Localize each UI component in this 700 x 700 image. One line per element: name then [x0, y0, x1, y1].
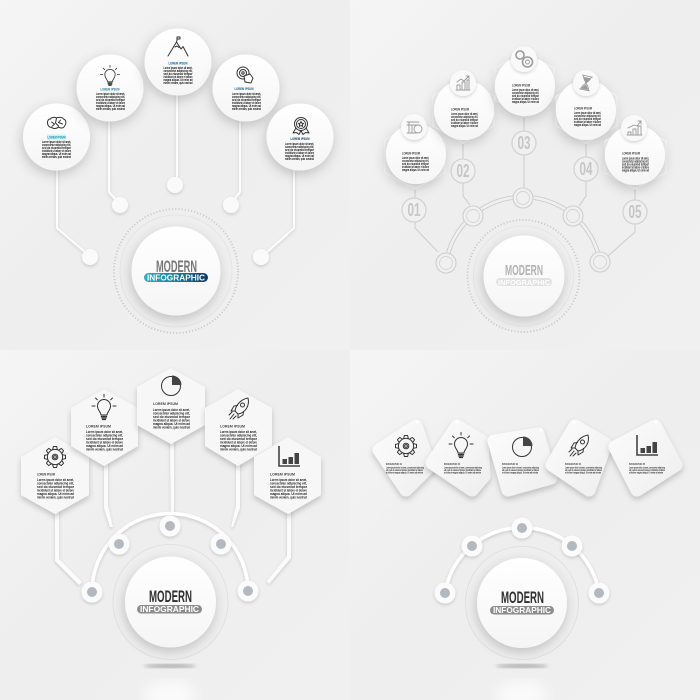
arc with nodes	[434, 518, 610, 604]
hexagon 1: gear: sed do eiusmod tempor	[37, 485, 75, 489]
connector lines	[57, 92, 294, 254]
card 5: award: Lorem ipsum dolor sit amet,	[285, 142, 314, 146]
number 02	[451, 159, 475, 183]
card 5: bar chart: elit, sed do eiusmod tempor incididunt ut labore	[629, 469, 665, 472]
card 3: pie chart: et dolore magna aliqua. Ut enim ad minim	[502, 472, 538, 474]
hexagon 5: bar chart: incididunt ut labore et dolore	[270, 488, 307, 492]
card 1: gear: et dolore magna aliqua. Ut enim ad minim	[386, 472, 423, 474]
arc with nodes	[82, 513, 258, 602]
shadow and reflection below badge	[144, 664, 196, 700]
card 4: rocket: Lorem ipsum dolor sit amet, consectetur adipiscing	[565, 466, 602, 470]
card 3: mountain	[144, 28, 212, 96]
hexagon 2: light bulb: sed do eiusmod tempor	[86, 437, 124, 441]
hexagon 4: rocket: magna aliqua. Ut enim ad	[220, 444, 257, 448]
panel: hexagon infographic (bottom left)	[21, 368, 321, 700]
card 3: mountain: LOREM IPSUM	[168, 60, 188, 66]
card 4: target: magna aliqua. Ut enim ad	[232, 104, 261, 108]
hexagon 2: light bulb: minim veniam, quis nostrud	[86, 448, 123, 452]
card 4: hourglass: LOREM IPSUM	[574, 106, 592, 110]
card 2: idea: consectetur adipiscing elit,	[96, 95, 125, 99]
central badge	[113, 544, 228, 660]
card 3: pie chart	[494, 428, 551, 490]
card 5: bar chart: et dolore magna aliqua. Ut enim ad minim	[629, 472, 663, 474]
card 3: mountain: incididunt ut labore et dolore	[164, 75, 193, 79]
panel: rotated card infographic (bottom right)	[379, 420, 676, 700]
number 05: 05	[628, 202, 642, 222]
hexagon 2: light bulb: magna aliqua. Ut enim ad	[86, 444, 123, 448]
number 03	[512, 131, 536, 155]
central badge: INFOGRAPHIC	[140, 605, 199, 614]
card 4: hourglass: magna aliqua. Ut enim ad	[574, 123, 601, 127]
card 4: hourglass: Lorem ipsum dolor sit amet,	[574, 111, 601, 115]
card 4: target: incididunt ut labore et dolore	[232, 101, 261, 105]
number 03: 03	[518, 133, 530, 153]
hexagon 5: bar chart: sed do eiusmod tempor	[270, 485, 308, 489]
card 2: growth chart: magna aliqua. Ut enim ad	[451, 124, 478, 128]
card 1: coins: Lorem ipsum dolor sit amet,	[402, 156, 429, 160]
hexagon 5: bar chart	[254, 437, 321, 514]
central badge: INFOGRAPHIC	[147, 273, 205, 283]
card 4: rocket: et dolore magna aliqua. Ut enim ad minim	[565, 472, 601, 474]
card 3: pie chart: INFOGRAPHIC 03	[502, 462, 518, 466]
card 5: rising bars: magna aliqua. Ut enim ad	[622, 168, 649, 172]
hexagon 3: pie chart: minim veniam, quis nostrud	[153, 426, 190, 430]
hexagon 4: rocket: incididunt ut labore et dolore	[220, 440, 257, 444]
card 1: coins: consectetur adipiscing elit,	[402, 159, 429, 163]
card 4: rocket: elit, sed do eiusmod tempor incididunt ut labore	[565, 469, 602, 472]
card 2: light bulb: Lorem ipsum dolor sit amet, consectetur adipiscing	[444, 466, 482, 470]
hexagon 5: bar chart: Lorem ipsum dolor sit amet,	[270, 478, 307, 482]
card 2: idea	[76, 54, 144, 122]
card 4: target	[212, 54, 280, 122]
hexagon 3: pie chart: incididunt ut labore et dolore	[153, 418, 190, 422]
card 2: growth chart: LOREM IPSUM	[451, 106, 469, 112]
panel: circles infographic (top left)	[23, 28, 334, 333]
hexagon 4: rocket: minim veniam, quis nostrud	[220, 448, 257, 452]
card 5: rising bars: sed do eiusmod tempor	[622, 162, 650, 166]
card 2: idea: Lorem ipsum dolor sit amet,	[96, 92, 125, 96]
card 5: rising bars: Lorem ipsum dolor sit amet,	[622, 156, 649, 160]
card 2: growth chart: sed do eiusmod tempor	[451, 118, 479, 122]
card 3: pie chart: Lorem ipsum dolor sit amet, consectetur adipiscing	[502, 466, 539, 470]
hexagon 2: light bulb: Lorem ipsum dolor sit amet,	[86, 430, 123, 434]
connector lines	[415, 117, 635, 256]
card 4: target: LOREM IPSUM	[234, 86, 254, 91]
hexagon 2: light bulb	[71, 389, 138, 466]
arc with nodes	[436, 188, 610, 273]
card 1: coins: incididunt ut labore et dolore	[402, 165, 429, 169]
card 1: brain: LOREM IPSUM	[48, 134, 66, 140]
number 02: 02	[456, 161, 470, 181]
hexagon 1: gear	[21, 437, 89, 514]
panel: hexagon and circle infographic (top right)	[385, 46, 666, 332]
card 4: hourglass: incididunt ut labore et dolore	[574, 120, 601, 124]
hexagon 1: gear: LOREM IPSUM	[37, 472, 55, 476]
card 5: award: magna aliqua. Ut enim ad	[285, 154, 314, 158]
central badge: INFOGRAPHIC	[498, 278, 551, 287]
card 2: growth chart	[433, 70, 494, 143]
card 5: rising bars: consectetur adipiscing elit,	[622, 160, 649, 164]
card 1: gear	[379, 420, 430, 490]
card 4: target: Lorem ipsum dolor sit amet,	[232, 92, 261, 96]
card 4: rocket: INFOGRAPHIC 04	[565, 462, 581, 466]
card 5: award: incididunt ut labore et dolore	[285, 151, 314, 155]
card 3: mountain: Lorem ipsum dolor sit amet,	[164, 66, 193, 70]
card 3: gears	[495, 46, 555, 117]
number 04	[574, 157, 598, 181]
card 3: mountain: magna aliqua. Ut enim ad	[164, 78, 193, 82]
card 1: brain: Lorem ipsum dolor sit amet,	[42, 140, 71, 144]
hexagon 1: gear: incididunt ut labore et dolore	[37, 488, 74, 492]
card 1: brain: sed do eiusmod tempor	[42, 146, 72, 150]
card 3: mountain: consectetur adipiscing elit,	[164, 69, 193, 73]
card 3: mountain: sed do eiusmod tempor	[164, 72, 193, 76]
card 2: idea: sed do eiusmod tempor	[96, 98, 126, 102]
card 1: gear: elit, sed do eiusmod tempor incididunt ut labore	[386, 469, 423, 472]
card 1: brain: consectetur adipiscing elit,	[42, 143, 71, 147]
card 5: award: consectetur adipiscing elit,	[285, 145, 314, 149]
hexagon 5: bar chart: minim veniam, quis nostrud	[270, 496, 307, 500]
hexagon 3: pie chart: magna aliqua. Ut enim ad	[153, 422, 190, 426]
card 1: brain	[23, 104, 90, 170]
card 1: coins: sed do eiusmod tempor	[402, 162, 430, 166]
connector end dots	[82, 177, 269, 265]
card 3: gears: consectetur adipiscing elit,	[512, 91, 539, 95]
card 5: award: minim veniam, quis nostrud	[285, 157, 314, 161]
card 1: gear: INFOGRAPHIC 01	[386, 462, 402, 466]
number 01: 01	[408, 200, 420, 220]
card 3: gears: Lorem ipsum dolor sit amet,	[512, 88, 539, 92]
card 2: light bulb: INFOGRAPHIC 02	[444, 462, 460, 466]
card 2: idea: LOREM IPSUM	[100, 86, 120, 92]
card 4: target: sed do eiusmod tempor	[232, 98, 262, 102]
card 2: idea: minim veniam, quis nostrud	[96, 107, 125, 111]
number 04: 04	[580, 159, 592, 179]
hexagon 1: gear: magna aliqua. Ut enim ad	[37, 492, 74, 496]
hexagon 1: gear: Lorem ipsum dolor sit amet,	[37, 478, 74, 482]
card 5: award: LOREM IPSUM	[290, 136, 310, 141]
card 5: bar chart: Lorem ipsum dolor sit amet, consectetur adipiscing	[629, 466, 665, 470]
hexagon 1: gear: consectetur adipiscing elit,	[37, 482, 74, 486]
card 2: idea: magna aliqua. Ut enim ad	[96, 104, 125, 108]
hexagon 3: pie chart: Lorem ipsum dolor sit amet,	[153, 408, 190, 412]
hexagon 3: pie chart: consectetur adipiscing elit,	[153, 412, 190, 416]
hexagon 3: pie chart	[137, 368, 205, 444]
number 01	[402, 198, 426, 222]
card 2: growth chart: Lorem ipsum dolor sit amet,	[451, 112, 478, 116]
hexagon 3: pie chart: sed do eiusmod tempor	[153, 415, 191, 419]
card 5: bar chart: INFOGRAPHIC 05	[629, 462, 645, 466]
hexagon 1: gear: minim veniam, quis nostrud	[37, 496, 74, 500]
number 05	[623, 200, 647, 224]
card 2: growth chart: consectetur adipiscing elit,	[451, 115, 478, 119]
hexagon 4: rocket: LOREM IPSUM	[220, 424, 246, 428]
central badge: MODERN	[156, 257, 197, 276]
card 5: rising bars: incididunt ut labore et dolore	[622, 166, 649, 170]
central badge	[468, 220, 580, 332]
card 3: pie chart: elit, sed do eiusmod tempor incididunt ut labore	[502, 469, 539, 472]
hexagon 5: bar chart: magna aliqua. Ut enim ad	[270, 492, 307, 496]
card 4: target: consectetur adipiscing elit,	[232, 95, 261, 99]
central badge	[114, 209, 238, 333]
card 1: brain: minim veniam, quis nostrud	[42, 155, 71, 159]
card 1: coins: magna aliqua. Ut enim ad	[402, 168, 429, 172]
card 2: light bulb: elit, sed do eiusmod tempor incididunt ut labore	[444, 469, 481, 472]
central badge: INFOGRAPHIC	[493, 606, 551, 615]
card 2: idea: incididunt ut labore et dolore	[96, 101, 125, 105]
card 2: light bulb	[432, 420, 484, 490]
central badge: MODERN	[505, 262, 543, 279]
card 3: gears: LOREM IPSUM	[512, 82, 530, 88]
hexagon 4: rocket: sed do eiusmod tempor	[220, 437, 258, 441]
card 3: mountain: minim veniam, quis nostrud	[164, 81, 193, 85]
hexagon 4: rocket: Lorem ipsum dolor sit amet,	[220, 430, 257, 434]
central badge	[466, 546, 578, 660]
central badge: MODERN	[149, 587, 192, 606]
card 3: gears: sed do eiusmod tempor	[512, 94, 540, 98]
hexagon 5: bar chart: LOREM IPSUM	[270, 472, 296, 476]
hexagon 5: bar chart: consectetur adipiscing elit,	[270, 482, 307, 486]
card 1: brain: magna aliqua. Ut enim ad	[42, 152, 71, 156]
hexagon 2: light bulb: LOREM IPSUM	[86, 424, 112, 428]
hexagon 4: rocket: consectetur adipiscing elit,	[220, 434, 257, 438]
card 2: growth chart: incididunt ut labore et dolore	[451, 121, 478, 125]
card 4: hourglass: consectetur adipiscing elit,	[574, 114, 601, 118]
hexagon 4: rocket	[205, 389, 272, 466]
connector stems	[55, 440, 291, 585]
card 1: gear: Lorem ipsum dolor sit amet, consectetur adipiscing	[386, 466, 424, 470]
card 1: coins	[385, 114, 446, 189]
card 1: brain: incididunt ut labore et dolore	[42, 149, 71, 153]
card 5: award: sed do eiusmod tempor	[285, 148, 315, 152]
card 3: gears: incididunt ut labore et dolore	[512, 97, 539, 101]
card 4: hourglass: sed do eiusmod tempor	[574, 117, 602, 121]
card 5: award	[266, 104, 334, 170]
central badge: MODERN	[501, 588, 544, 607]
card 5: rising bars	[605, 115, 666, 189]
card 1: coins: LOREM IPSUM	[402, 150, 420, 156]
card 4: hourglass	[556, 70, 617, 143]
shadow and reflection below badge	[496, 664, 548, 700]
card 5: rising bars: LOREM IPSUM	[622, 150, 640, 156]
hexagon 2: light bulb: incididunt ut labore et dolore	[86, 440, 123, 444]
hexagon 2: light bulb: consectetur adipiscing elit,	[86, 434, 123, 438]
card 2: light bulb: et dolore magna aliqua. Ut enim ad minim	[444, 472, 481, 474]
hexagon 3: pie chart: LOREM IPSUM	[153, 401, 179, 406]
card 5: bar chart	[615, 420, 676, 490]
card 3: gears: magna aliqua. Ut enim ad	[512, 100, 539, 104]
card 4: rocket	[552, 420, 606, 490]
card 4: target: minim veniam, quis nostrud	[232, 107, 261, 111]
